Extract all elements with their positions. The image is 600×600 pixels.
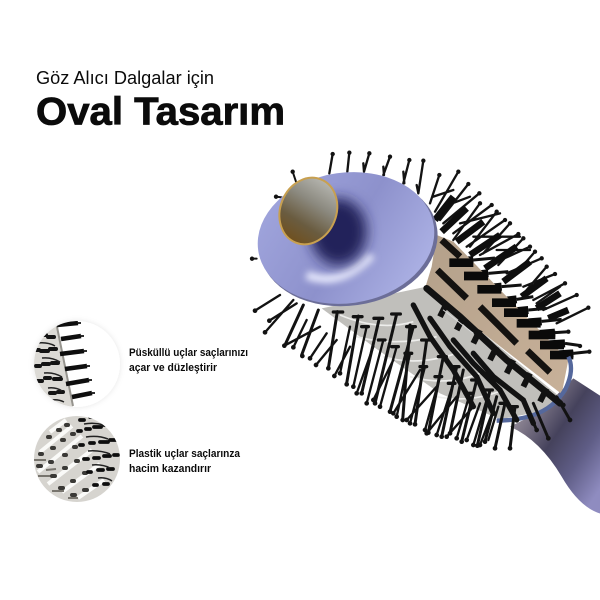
stems (285, 305, 570, 448)
label: tufted tips: açar ve düzleştirir (129, 362, 217, 374)
circle photo: tufted tips (30, 320, 120, 408)
circle photo: plastic tips (34, 416, 120, 502)
knob neck shadow (310, 198, 367, 265)
label: plastic tips: Plastik uçlar saçlarınza (129, 448, 240, 460)
bristle tips (255, 311, 570, 448)
tufted row along barrel (427, 288, 560, 403)
feature: tufted tips (30, 320, 248, 408)
barrel lower body (322, 287, 562, 419)
bristle base caps (333, 312, 517, 407)
disc highlight (307, 255, 372, 279)
label: tufted tips: Püsküllü uçlar saçlarınızı (129, 347, 248, 359)
disc top (249, 161, 443, 315)
label: tufted tips (129, 347, 248, 374)
top bristles (252, 153, 589, 355)
upper bristle bases on barrel (449, 263, 573, 355)
brush handle (510, 378, 600, 514)
feature: plastic tips (34, 416, 240, 502)
disc rim (251, 165, 446, 317)
lower bristles (255, 288, 570, 448)
barrel tan face (425, 235, 568, 394)
subtitle: Göz Alıcı Dalgalar için (36, 68, 214, 88)
knob cap (270, 169, 347, 253)
label: plastic tips: hacim kazandırır (129, 463, 211, 475)
barrel end rim (497, 357, 571, 421)
brush illustration (249, 153, 600, 514)
barrel slots (437, 240, 550, 372)
row highlights (443, 310, 473, 333)
title: Oval Tasarım (36, 90, 285, 134)
barrel lower ribs (340, 315, 503, 399)
label: plastic tips (129, 448, 240, 475)
